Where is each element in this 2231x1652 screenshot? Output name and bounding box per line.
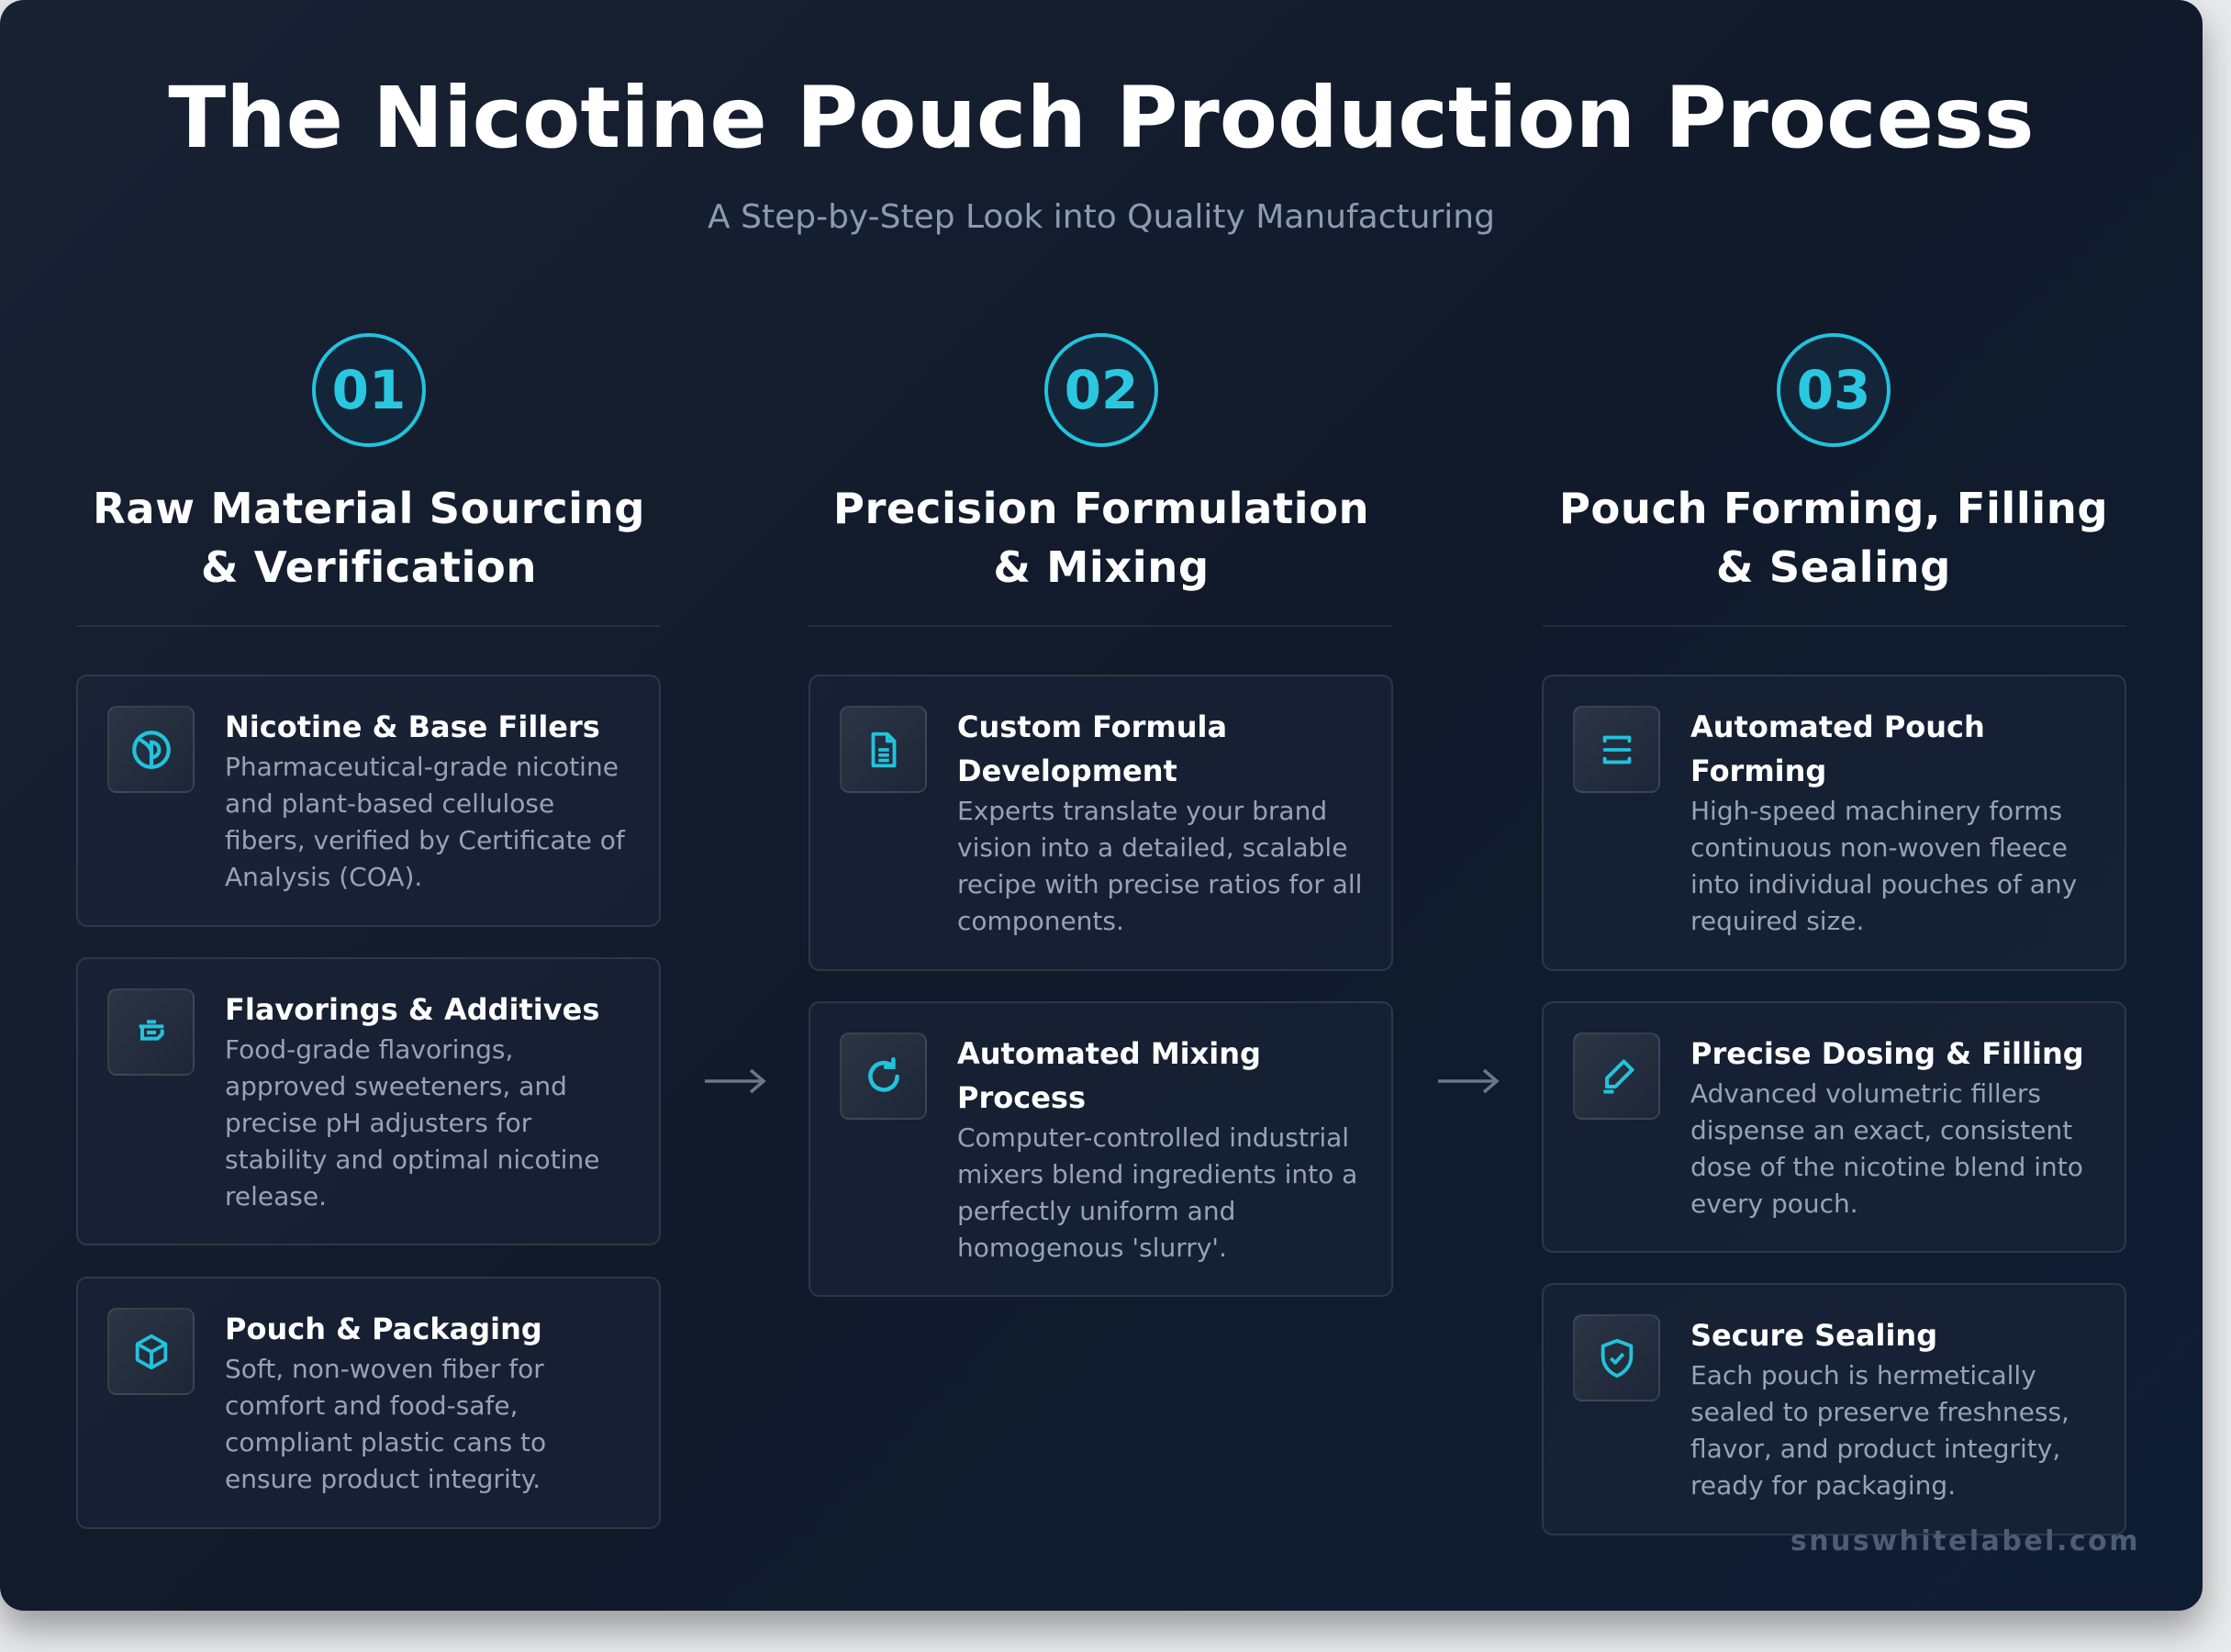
text: Experts translate your brand vision into a detailed, scalable recipe with precise ratios for all components. — [957, 796, 1362, 936]
icon: pen — [1573, 1032, 1660, 1120]
step number 01 — [312, 333, 426, 447]
text — [1690, 709, 2077, 936]
card: Flavorings & Additives — [76, 957, 661, 1245]
subtitle: A Step-by-Step Look into Quality Manufacturing — [708, 198, 1495, 236]
step number 03: 03 — [1797, 359, 1870, 421]
heading: column 1: Raw Material Sourcing — [93, 484, 645, 533]
card: Pouch & Packaging — [76, 1277, 661, 1529]
step number 02 — [1044, 333, 1158, 447]
heading: column 2: & Mixing — [993, 542, 1210, 592]
text: Pouch & Packaging — [225, 1312, 542, 1346]
icon: forming — [1573, 706, 1660, 793]
text: Flavorings & Additives — [225, 992, 599, 1027]
heading: column 3 — [1559, 484, 2108, 592]
icon: shield — [1573, 1314, 1660, 1401]
card: Automated Mixing Process — [809, 1001, 1393, 1297]
text: Secure Sealing — [1690, 1318, 1937, 1353]
text: Nicotine & Base Fillers — [225, 709, 600, 744]
heading: column 1: & Verification — [201, 542, 537, 592]
text: Precise Dosing & Filling — [1690, 1036, 2084, 1071]
arrow: step 2 to 3 — [1438, 1068, 1500, 1094]
text: Food-grade flavorings, approved sweeteners, and precise pH adjusters for stability and optimal nicotine release. — [225, 1034, 599, 1211]
heading: column 2 — [833, 484, 1369, 592]
card: Nicotine & Base Fillers — [76, 675, 661, 927]
arrow: step 1 to 2 — [705, 1068, 765, 1094]
text: Each pouch is hermetically sealed to preserve freshness, flavor, and product integrity, ready for packaging. — [1690, 1360, 2069, 1501]
heading: column 3: Pouch Forming, Filling — [1559, 484, 2108, 533]
text: Custom Formula Development — [957, 709, 1227, 788]
text: Automated Mixing Process — [957, 1036, 1261, 1115]
heading: column 3: & Sealing — [1716, 542, 1951, 592]
card: Custom Formula Development — [809, 675, 1393, 971]
title: The Nicotine Pouch Production Process — [168, 69, 2035, 167]
heading: column 2: Precision Formulation — [833, 484, 1369, 533]
icon: flavor — [107, 988, 195, 1076]
text: Automated Pouch Forming — [1690, 709, 1985, 788]
icon: document — [840, 706, 927, 793]
card: Automated Pouch Forming — [1542, 675, 2126, 971]
icon: box — [107, 1308, 195, 1395]
icon: refresh — [840, 1032, 927, 1120]
card: Precise Dosing & Filling — [1542, 1001, 2126, 1253]
text: High-speed machinery forms continuous non-woven fleece into individual pouches of any required size. — [1690, 796, 2077, 936]
step number 03 — [1777, 333, 1891, 447]
heading: column 1 — [93, 484, 645, 592]
text — [957, 709, 1362, 936]
text: Advanced volumetric fillers dispense an exact, consistent dose of the nicotine blend into every pouch. — [1690, 1078, 2083, 1219]
text — [957, 1036, 1357, 1263]
text: Computer-controlled industrial mixers blend ingredients into a perfectly uniform and homogenous 'slurry'. — [957, 1122, 1357, 1263]
text: Pharmaceutical-grade nicotine and plant-based cellulose fibers, verified by Certificate of Analysis (COA). — [225, 752, 625, 892]
icon: nicotine — [107, 706, 195, 793]
card: Secure Sealing — [1542, 1283, 2126, 1535]
watermark: snuswhitelabel.com — [1790, 1525, 2140, 1557]
text: Soft, non-woven fiber for comfort and food-safe, compliant plastic cans to ensure product integrity. — [225, 1354, 546, 1494]
step number 02: 02 — [1065, 359, 1138, 421]
step number 01: 01 — [332, 359, 406, 421]
